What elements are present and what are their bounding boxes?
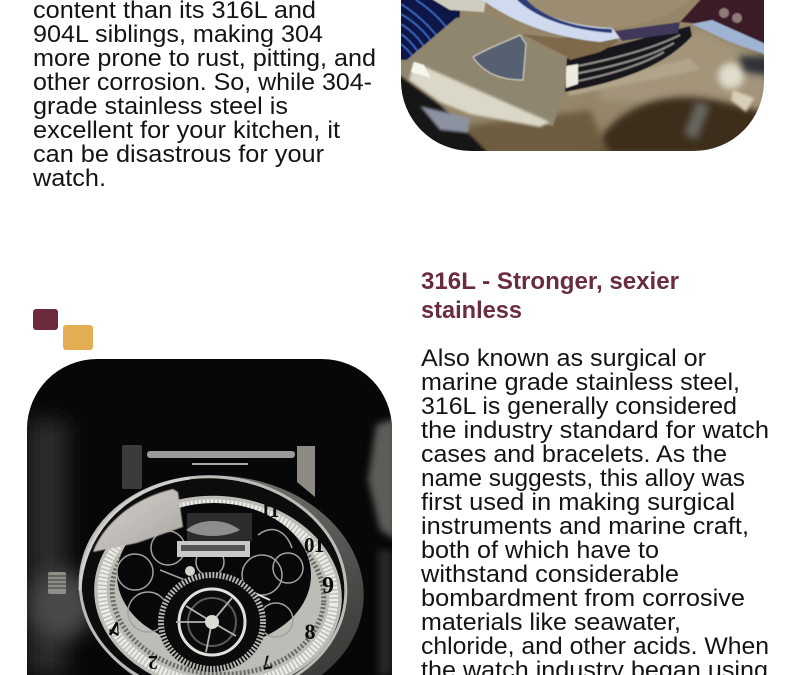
text block: 304 grade corrosion: watch. [32,165,106,192]
text block: 304 grade corrosion: grade stainless steel is [33,93,288,120]
heading: 316L [421,268,679,324]
mirrored dial numerals: 10 [304,533,325,557]
text block: 316L description: cases and bracelets. As the [421,441,727,468]
text block: 316L description: marine grade stainless steel, [421,369,740,396]
text block: 316L description: 316L is generally considered [421,393,737,420]
heading: 316L: 316L - Stronger, sexier [421,268,679,295]
photo: skeleton watch on black [27,359,396,675]
text block: 316L description: both of which have to [421,537,659,564]
text block: 316L description: materials like seawater, [421,609,681,636]
text block: 316L description [420,345,769,675]
text block: 304 grade corrosion: can be disastrous for your [33,141,324,168]
logo plaque [177,513,252,557]
skeleton dial centre [117,503,311,647]
text block: 304 grade corrosion: excellent for your kitchen, it [33,117,340,144]
mirrored dial numerals: 2 [148,651,158,673]
crown [48,572,66,594]
glass reflection [93,489,183,552]
lugs and strap bar [122,445,315,497]
text block: 316L description: withstand considerable [420,561,679,588]
mirrored dial numerals: 11 [261,500,280,522]
mirrored dial numerals: 6 [322,571,334,597]
text block: 304 grade corrosion [32,0,376,192]
mirrored dial numerals: 7 [260,650,274,674]
decorative squares: maroon and gold [33,309,93,350]
text block: 316L description: bombardment from corrosive [421,585,745,612]
white highlight at top [430,0,486,12]
mirrored dial numerals: 4 [105,616,127,643]
text block: 304 grade corrosion: 904L siblings, making 304 [33,21,323,48]
upper disc with rim [523,0,693,28]
dark stacked ring [560,26,692,92]
mirrored dial numerals [105,500,334,674]
maroon band [680,0,764,44]
mirrored dial numerals: 8 [304,619,316,644]
text block: 316L description: chloride, and other acids. When [421,633,769,660]
blue coil [395,0,460,60]
text block: 316L description: instruments and marine craft, [421,513,749,540]
watch case [78,475,364,675]
text block: 304 grade corrosion: more prone to rust, pitting, and [33,45,376,72]
text block: 304 grade corrosion: other corrosion. So, while 304- [33,69,372,96]
heading: 316L: stainless [421,297,522,324]
text block: 316L description: Also known as surgical or [421,345,706,372]
tourbillon [158,572,266,672]
text block: 316L description: first used in making surgical [421,489,735,516]
dial ring [94,496,342,675]
grey-blue inlay [473,35,526,80]
text block: 316L description: name suggests, this alloy was [421,465,745,492]
metal bracket [402,12,567,126]
photo: close-up of watch movement [395,0,770,155]
text block: 316L description: the industry standard for watch [421,417,769,444]
